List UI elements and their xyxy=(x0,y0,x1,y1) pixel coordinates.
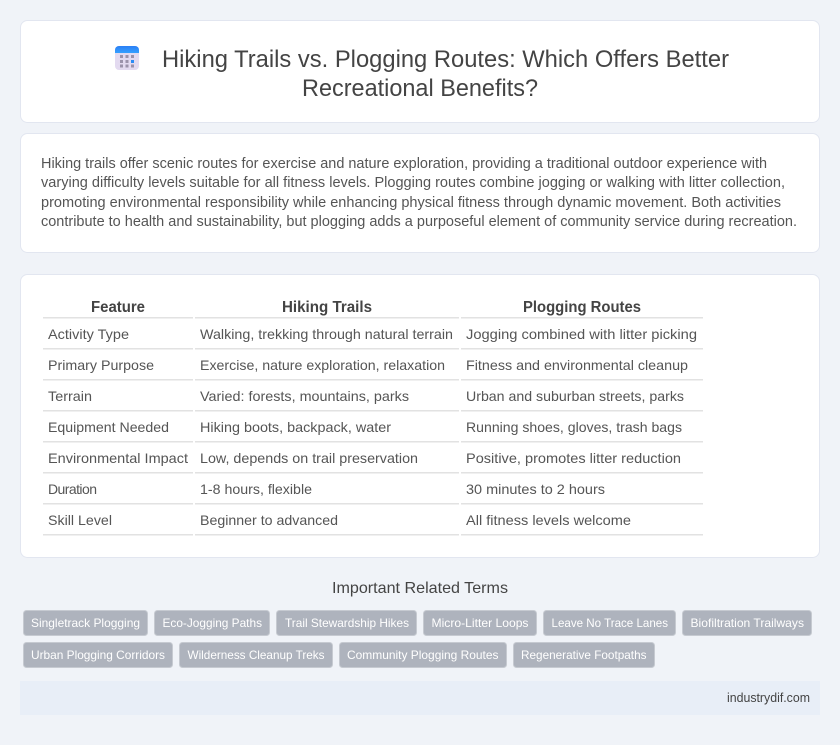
row: primary purpose: Fitness and environmental cleanup xyxy=(466,357,688,373)
heading: important related terms: Important Related Terms xyxy=(332,580,508,597)
row: environmental impact: Low, depends on trail preservation xyxy=(200,450,418,466)
tag: Regenerative Footpaths xyxy=(521,648,646,662)
tag xyxy=(276,610,416,636)
row: duration: 30 minutes to 2 hours xyxy=(466,481,605,497)
row: skill level: Beginner to advanced xyxy=(200,512,338,528)
row: activity type: Activity Type xyxy=(48,326,129,342)
tag: Singletrack Plogging xyxy=(31,616,140,630)
tag xyxy=(514,642,654,668)
summary text: Hiking trails offer scenic routes for exercise and nature exploration, providing a traditional outdoor experience with xyxy=(41,156,767,172)
tag: Trail Stewardship Hikes xyxy=(285,616,409,630)
row: skill level: All fitness levels welcome xyxy=(466,512,631,528)
row: environmental impact xyxy=(43,450,703,474)
row: primary purpose: Exercise, nature exploration, relaxation xyxy=(200,357,445,373)
tag xyxy=(180,642,332,668)
tags: related terms xyxy=(24,610,812,668)
table header: Hiking Trails xyxy=(282,299,372,316)
row: equipment needed: Running shoes, gloves, trash bags xyxy=(466,419,682,435)
tag xyxy=(24,642,172,668)
footer xyxy=(20,681,820,715)
row: duration: Duration xyxy=(48,481,97,497)
tag: Micro-Litter Loops xyxy=(432,616,528,630)
row: terrain: Urban and suburban streets, parks xyxy=(466,388,684,404)
tag xyxy=(682,610,812,636)
row: environmental impact: Environmental Impact xyxy=(48,450,188,466)
row: terrain: Terrain xyxy=(48,388,92,404)
tag: Wilderness Cleanup Treks xyxy=(188,648,324,662)
panel: summary xyxy=(20,134,820,252)
tag xyxy=(154,610,270,636)
row: equipment needed xyxy=(43,419,703,442)
tag: Biofiltration Trailways xyxy=(690,616,804,630)
row: primary purpose xyxy=(43,357,703,380)
tag: Community Plogging Routes xyxy=(347,648,498,662)
row: primary purpose: Primary Purpose xyxy=(48,357,154,373)
table header: Plogging Routes xyxy=(523,299,641,316)
summary text xyxy=(41,156,797,230)
row: equipment needed: Hiking boots, backpack, water xyxy=(200,419,391,435)
panel: comparison table xyxy=(20,274,820,558)
row: activity type: Walking, trekking through natural terrain xyxy=(200,326,453,342)
icon: calendar xyxy=(115,46,139,70)
summary text: promoting environmental responsibility while enhancing physical fitness through dynamic movement. Both activities xyxy=(41,195,781,211)
row: activity type: Jogging combined with litter picking xyxy=(466,326,697,342)
tag xyxy=(340,642,506,668)
tag xyxy=(544,610,676,636)
title: Hiking Trails vs. Plogging Routes: Which Offers Better xyxy=(162,46,729,73)
table header: Feature xyxy=(91,299,145,316)
title: Recreational Benefits? xyxy=(302,75,538,102)
summary text: varying difficulty levels suitable for all fitness levels. Plogging routes combine jogging or walking with litter collection, xyxy=(41,175,785,191)
row: terrain: Varied: forests, mountains, parks xyxy=(200,388,409,404)
row: skill level xyxy=(43,512,703,536)
tag: Eco-Jogging Paths xyxy=(162,616,262,630)
panel: title card xyxy=(20,20,820,122)
tag: Leave No Trace Lanes xyxy=(552,616,668,630)
row: duration xyxy=(43,481,703,504)
row: skill level: Skill Level xyxy=(48,512,112,528)
summary text: contribute to health and sustainability, but plogging adds a purposeful element of community service during recreation. xyxy=(41,214,797,230)
tag xyxy=(424,610,536,636)
tag: Urban Plogging Corridors xyxy=(31,648,165,662)
tag xyxy=(24,610,148,636)
row: equipment needed: Equipment Needed xyxy=(48,419,169,435)
table header xyxy=(43,299,703,318)
row: activity type xyxy=(43,326,703,350)
row: terrain xyxy=(43,388,703,412)
footer: industrydif.com xyxy=(727,691,810,705)
title xyxy=(162,46,729,102)
row: environmental impact: Positive, promotes litter reduction xyxy=(466,450,681,466)
row: duration: 1-8 hours, flexible xyxy=(200,481,312,497)
